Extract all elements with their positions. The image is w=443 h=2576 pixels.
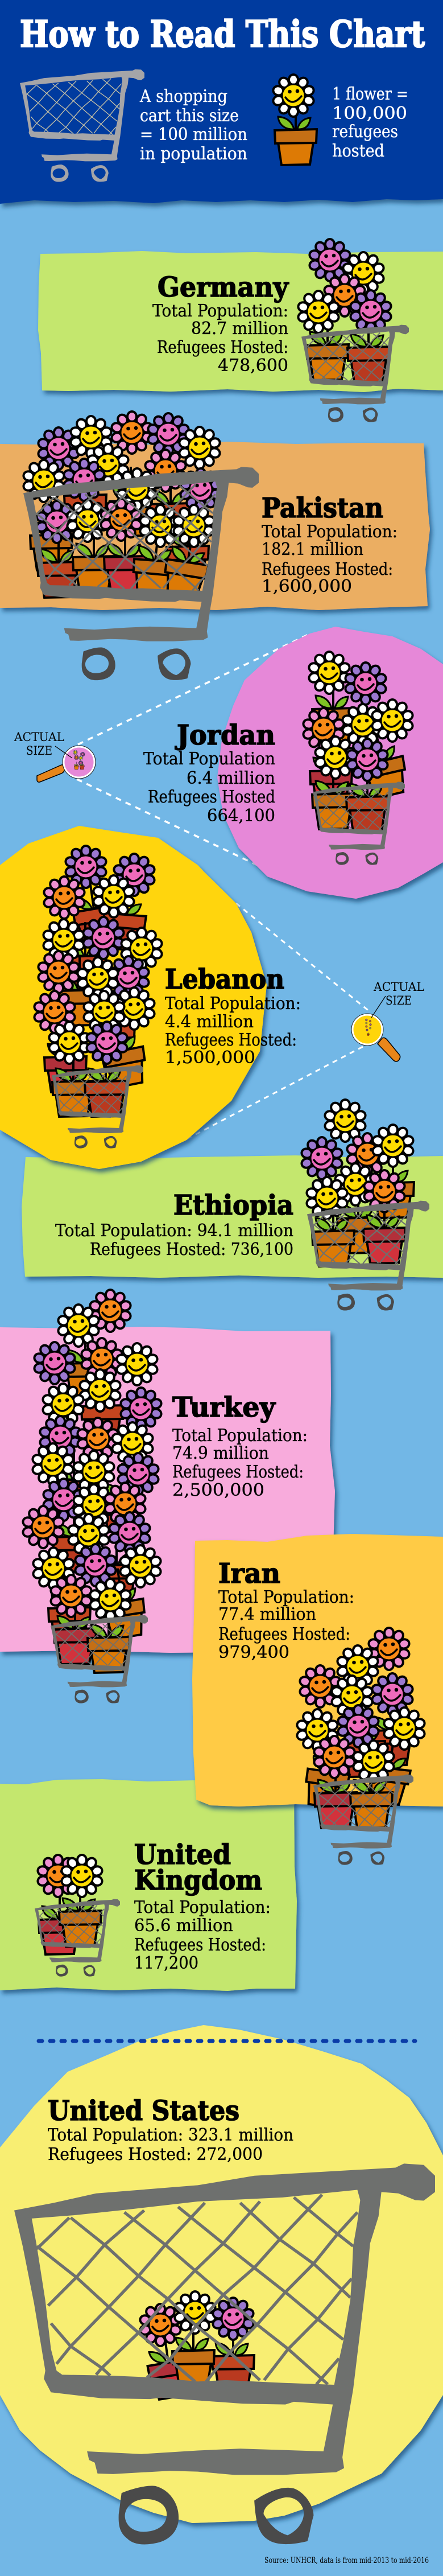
text: Turkey: Total Population:	[172, 1426, 308, 1446]
text: Lebanon: Total Population:	[165, 994, 301, 1014]
legend text: flower scale: 1 flower =	[332, 84, 408, 104]
dotted lines: Lebanon magnifier	[185, 903, 370, 1140]
panel: United Kingdom	[0, 1779, 297, 1991]
callout: Jordan actual size magnifier	[14, 730, 96, 782]
text: Lebanon: 4.4 million	[165, 1012, 254, 1032]
text: Turkey	[172, 1392, 308, 1500]
text: Pakistan	[262, 492, 398, 596]
text: United Kingdom: 117,200	[134, 1953, 198, 1973]
text: Lebanon: Lebanon	[165, 964, 284, 995]
text: United Kingdom	[134, 1839, 271, 1973]
legend text: flower scale: 100,000	[332, 104, 407, 124]
text: United States	[48, 2095, 293, 2165]
text: Jordan: Total Population	[143, 749, 275, 769]
legend text: cart scale: in population	[140, 144, 247, 164]
label: actual size: SIZE	[26, 744, 52, 758]
text: Pakistan: Pakistan	[262, 492, 383, 524]
label: actual size: ACTUAL	[373, 980, 424, 994]
text: Jordan: Refugees Hosted	[148, 787, 275, 807]
text: Jordan	[143, 719, 275, 826]
text: Lebanon	[165, 964, 301, 1068]
text: Jordan: Jordan	[175, 719, 275, 751]
text: Turkey: Refugees Hosted:	[172, 1462, 304, 1482]
panel: Turkey	[0, 1290, 335, 1703]
text: Iran: Total Population:	[218, 1587, 354, 1607]
text: Germany: Total Population:	[152, 301, 288, 321]
label: actual size	[373, 980, 424, 1007]
panel: Lebanon	[0, 826, 301, 1169]
text: Turkey: 2,500,000	[172, 1480, 264, 1500]
text: Iran	[218, 1558, 354, 1663]
text: Pakistan: 1,600,000	[262, 577, 352, 596]
legend text: cart scale	[139, 87, 247, 164]
flowers and cart: Iran	[296, 1628, 426, 1865]
text: United Kingdom: Refugees Hosted:	[134, 1935, 266, 1955]
text: Ethiopia: Total Population: 94.1 million	[55, 1221, 293, 1241]
text: Lebanon: 1,500,000	[165, 1048, 255, 1068]
text: United Kingdom: Kingdom	[134, 1865, 262, 1896]
text: Germany: Refugees Hosted:	[157, 338, 288, 357]
text: Iran: 77.4 million	[218, 1604, 316, 1624]
dotted lines: Jordan magnifier	[77, 634, 309, 880]
text: United States: Total Population: 323.1 million	[48, 2125, 293, 2145]
label: actual size	[14, 730, 64, 758]
callout: Lebanon actual size magnifier	[351, 980, 424, 1061]
text: Jordan: 664,100	[207, 806, 275, 826]
icon: legend shopping cart	[20, 69, 144, 182]
legend text: cart scale: cart this size	[140, 106, 239, 126]
text: Jordan: 6.4 million	[187, 768, 275, 788]
flowers and cart: Lebanon	[33, 846, 163, 1149]
flowers and cart: Ethiopia	[300, 1100, 429, 1311]
flowers and cart: Turkey	[22, 1290, 163, 1703]
legend text: cart scale: = 100 million	[140, 125, 247, 145]
text: Iran: Refugees Hosted:	[218, 1624, 350, 1644]
label: actual size: ACTUAL	[14, 730, 64, 744]
legend text: cart scale: A shopping	[139, 87, 227, 106]
flowers and cart: Pakistan	[22, 411, 259, 680]
panel: United States	[0, 2025, 443, 2544]
flowers and cart: Jordan	[302, 652, 414, 865]
text: United Kingdom: 65.6 million	[134, 1916, 233, 1936]
text: United States: United States	[48, 2095, 239, 2127]
text: Ethiopia: Refugees Hosted: 736,100	[90, 1240, 293, 1260]
panel: Iran	[192, 1534, 443, 1865]
panel: Pakistan	[0, 411, 430, 680]
text: Germany	[152, 271, 289, 376]
divider: dashed line	[39, 2039, 415, 2043]
panel: Ethiopia	[22, 1100, 443, 1311]
legend text: flower scale: refugees	[332, 122, 398, 142]
text: United States: Refugees Hosted: 272,000	[48, 2145, 263, 2165]
text: Germany: Germany	[158, 271, 289, 303]
text: Ethiopia: Ethiopia	[173, 1190, 293, 1221]
text: Germany: 478,600	[218, 356, 288, 376]
text: Lebanon: Refugees Hosted:	[165, 1030, 297, 1050]
flowers and pots: United States	[139, 2291, 255, 2401]
icon: magnifying glass	[351, 996, 400, 1061]
flowers and cart: Germany	[297, 239, 409, 422]
text: Turkey: 74.9 million	[172, 1443, 269, 1463]
icon: large shopping cart	[14, 2163, 435, 2544]
flowers and cart: United Kingdom	[35, 1855, 120, 1977]
panel: how to read this chart header	[0, 0, 443, 204]
text: Pakistan: Total Population:	[262, 522, 398, 542]
label: actual size: SIZE	[386, 994, 412, 1007]
legend text: flower scale	[332, 84, 408, 161]
text: Turkey: Turkey	[172, 1392, 276, 1423]
panel: Jordan	[143, 627, 443, 899]
icon: legend flower pot	[272, 75, 317, 165]
text: Pakistan: 182.1 million	[262, 540, 363, 559]
text: Germany: 82.7 million	[191, 319, 288, 339]
icon: magnifying glass	[37, 746, 96, 782]
text: Iran: Iran	[218, 1558, 280, 1590]
text: Pakistan: Refugees Hosted:	[262, 559, 393, 579]
text: Iran: 979,400	[218, 1643, 289, 1663]
text: United Kingdom: United	[134, 1839, 231, 1871]
panel: Germany	[38, 239, 443, 422]
legend text: flower scale: hosted	[332, 141, 384, 161]
text: Ethiopia	[55, 1190, 293, 1260]
text: United Kingdom: Total Population:	[134, 1898, 271, 1917]
